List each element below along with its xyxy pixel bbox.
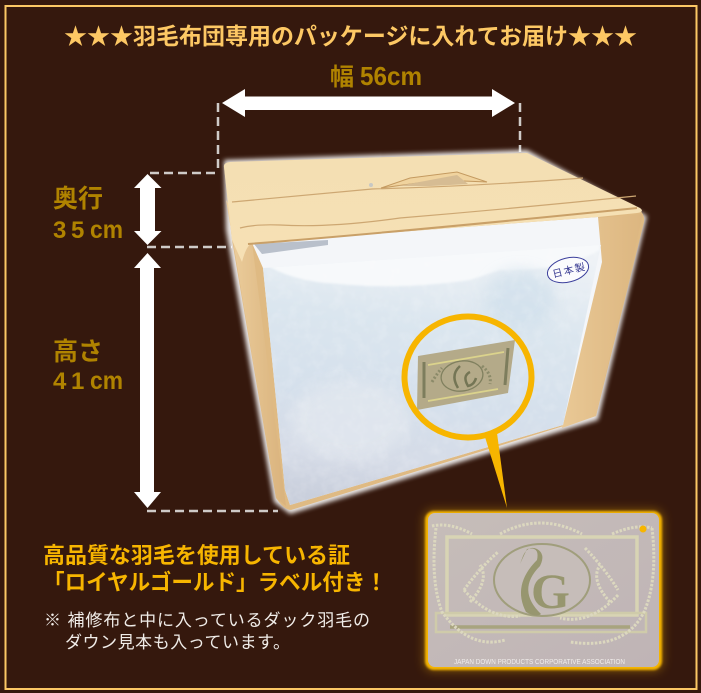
gold inner frame bbox=[436, 537, 646, 632]
card face bbox=[428, 513, 659, 667]
card glow bbox=[424, 510, 663, 671]
plastic top strip bbox=[254, 240, 328, 254]
card border bbox=[425, 511, 662, 670]
bag body bbox=[224, 153, 644, 510]
depth label: 奥行 bbox=[53, 185, 103, 213]
headline: Royal Gold label: 「ロイヤルゴールド」ラベル付き！ bbox=[43, 570, 387, 595]
lid seams bbox=[232, 178, 637, 244]
height label: 高さ bbox=[53, 338, 103, 366]
card caption: JAPAN DOWN PRODUCTS CORPORATIVE ASSOCIATION bbox=[454, 657, 625, 666]
height label: cm bbox=[90, 367, 123, 395]
handle bbox=[369, 172, 487, 188]
footnote bbox=[44, 611, 370, 652]
footnote: ダウン見本も入っています。 bbox=[65, 633, 290, 652]
bag left side bbox=[226, 200, 286, 506]
pillow top sheen bbox=[252, 215, 605, 510]
width arrow bbox=[222, 89, 515, 117]
height arrow bbox=[134, 253, 161, 508]
certificate card: Royal Gold label bbox=[424, 510, 663, 671]
height label: 41 bbox=[53, 368, 89, 395]
depth label: 35 bbox=[53, 217, 89, 244]
width label: 56cm bbox=[360, 61, 422, 91]
pillow window bbox=[252, 217, 602, 505]
bag right side bbox=[562, 214, 643, 428]
made in Japan sticker bbox=[545, 253, 591, 287]
depth label bbox=[53, 185, 123, 244]
pillow bbox=[263, 245, 601, 505]
headline: Royal Gold label: 高品質な羽毛を使用している証 bbox=[43, 543, 350, 568]
swan G emblem: G bbox=[531, 563, 570, 619]
width label: 幅 bbox=[330, 64, 354, 91]
footnote: ※ 補修布と中に入っているダック羽毛の bbox=[44, 611, 370, 630]
depth arrow bbox=[134, 174, 162, 245]
floral ornaments bbox=[432, 523, 654, 643]
product photo: duvet package bbox=[224, 150, 647, 514]
dimension guide lines bbox=[147, 103, 520, 511]
bag lid bbox=[224, 153, 642, 262]
woven label on pillow bbox=[417, 340, 515, 410]
gold dot bbox=[640, 526, 646, 532]
title: ★★★羽毛布団専用のパッケージに入れてお届け★★★ bbox=[64, 23, 637, 49]
swan G emblem bbox=[494, 544, 590, 619]
bag glow bbox=[224, 150, 647, 514]
callout ring with pointer bbox=[404, 316, 532, 508]
headline: Royal Gold label bbox=[43, 543, 387, 595]
made in Japan sticker: 日本製 bbox=[551, 260, 586, 281]
depth label: cm bbox=[90, 216, 123, 244]
width label bbox=[330, 61, 422, 91]
height label bbox=[53, 338, 123, 395]
